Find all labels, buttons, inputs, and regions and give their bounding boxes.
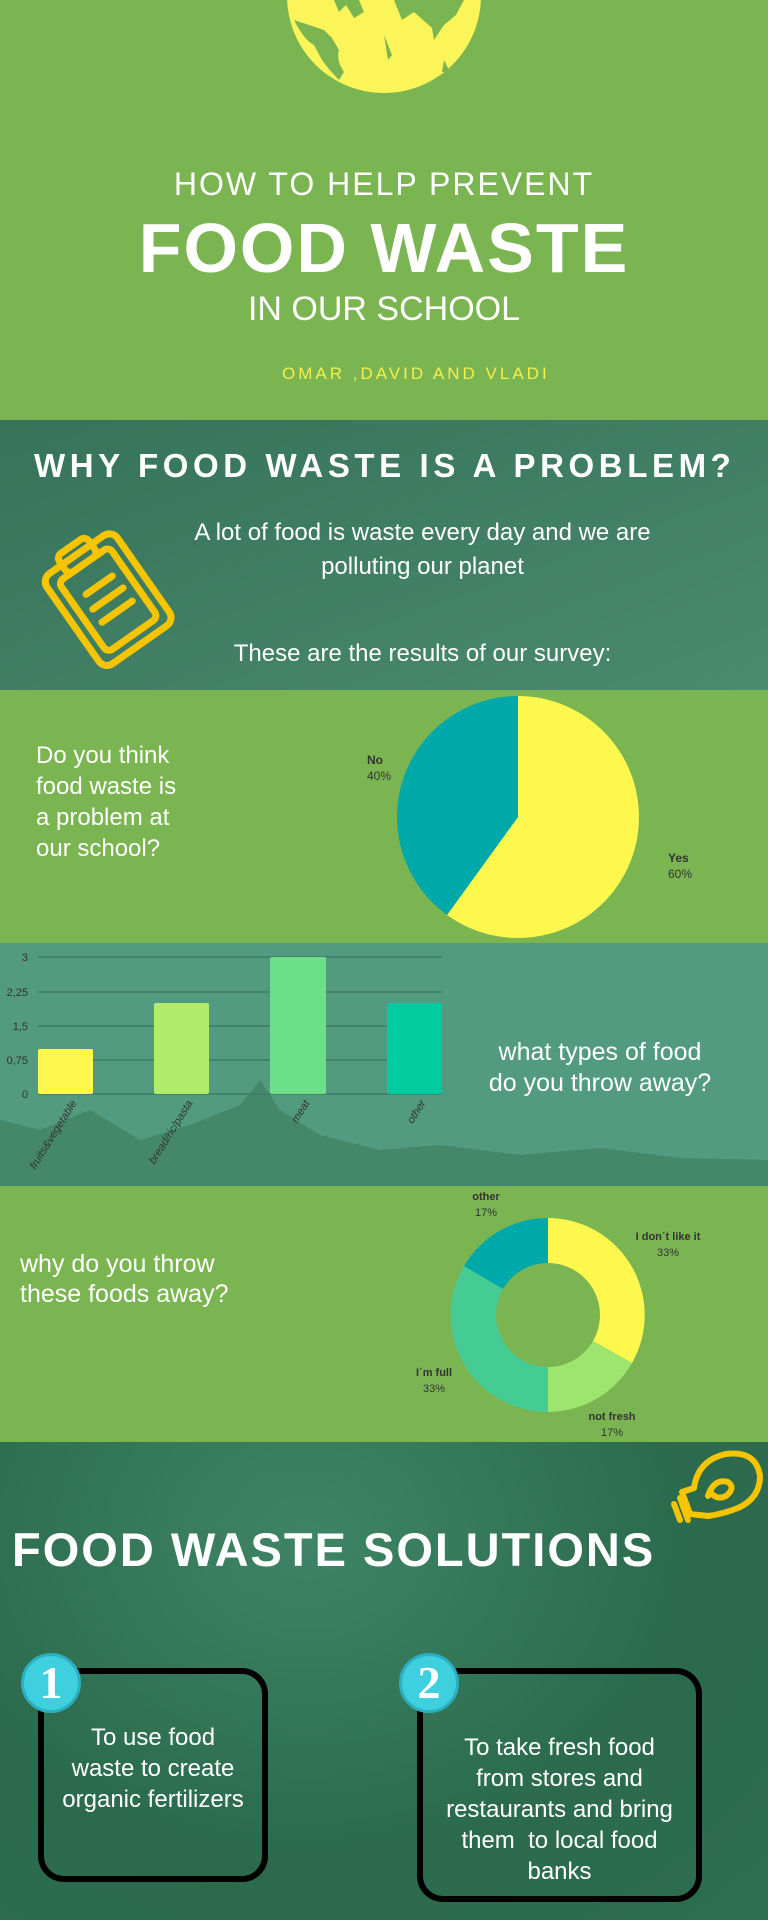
header section bbox=[0, 0, 768, 420]
donut chart: I´m full bbox=[416, 1367, 452, 1379]
panel: solutions bbox=[0, 1442, 768, 1920]
donut chart bbox=[416, 1191, 701, 1439]
pie chart: No bbox=[367, 753, 383, 767]
question text: why do you throw bbox=[20, 1250, 215, 1278]
panel: bar chart: 3 bbox=[22, 952, 28, 964]
donut chart: 17% bbox=[475, 1207, 497, 1219]
pie chart bbox=[367, 696, 692, 938]
solution 2 card: To take fresh food bbox=[464, 1734, 655, 1761]
donut chart: other bbox=[472, 1191, 500, 1203]
solution 2 card: restaurants and bring bbox=[446, 1796, 673, 1823]
solution 1 card: waste to create bbox=[72, 1755, 234, 1782]
donut chart: 33% bbox=[423, 1383, 445, 1395]
panel: pie question bbox=[0, 690, 768, 943]
question text bbox=[489, 1038, 711, 1097]
question text bbox=[20, 1250, 228, 1308]
panel: donut question bbox=[0, 1186, 768, 1442]
question text: do you throw away? bbox=[489, 1069, 711, 1097]
text: survey: These are the results of our survey: bbox=[234, 640, 611, 667]
panel: bar chart: bread/ric/pasta bbox=[147, 1098, 196, 1166]
pie chart: 60% bbox=[668, 867, 692, 881]
question text: food waste is bbox=[36, 773, 176, 800]
question text: Do you think bbox=[36, 742, 169, 769]
panel: why problem bbox=[0, 420, 768, 690]
panel: bar chart: 1,5 bbox=[13, 1021, 28, 1033]
badge 2: 2 bbox=[418, 1657, 440, 1708]
solution 1 card: organic fertilizers bbox=[62, 1786, 244, 1813]
solution 1 card: To use food bbox=[91, 1724, 215, 1751]
title main: FOOD WASTE bbox=[139, 209, 629, 287]
question text bbox=[36, 742, 176, 862]
panel: bar chart bbox=[0, 943, 768, 1186]
donut chart: I don´t like it bbox=[636, 1231, 701, 1243]
pie chart: Yes bbox=[668, 851, 689, 865]
badge 1: 1 bbox=[40, 1657, 62, 1708]
solution 2 card: banks bbox=[527, 1858, 592, 1885]
panel: bar chart: meat bbox=[289, 1097, 313, 1125]
panel: bar chart: fruits&vegetable bbox=[28, 1098, 80, 1171]
solution 2 card: them to local food bbox=[461, 1827, 658, 1854]
title line 1: HOW TO HELP PREVENT bbox=[174, 166, 594, 202]
text: lot of food: A lot of food is waste every day and we are polluting our planet bbox=[194, 519, 651, 580]
solution 2 card bbox=[417, 1668, 702, 1902]
pie chart: 40% bbox=[367, 769, 391, 783]
heading: FOOD WASTE SOLUTIONS bbox=[12, 1523, 655, 1576]
question text: a problem at bbox=[36, 804, 169, 831]
donut chart: 33% bbox=[657, 1247, 679, 1259]
bars bbox=[38, 957, 442, 1094]
icon: clipboard bbox=[42, 530, 174, 669]
panel: bar chart: 0,75 bbox=[7, 1055, 28, 1067]
question text: these foods away? bbox=[20, 1280, 228, 1308]
panel: bar chart: other bbox=[405, 1097, 429, 1126]
icon: light bulb bbox=[671, 1450, 763, 1523]
solution 2 card: from stores and bbox=[476, 1765, 643, 1792]
question text: what types of food bbox=[499, 1038, 701, 1066]
panel: bar chart: 0 bbox=[22, 1089, 28, 1101]
badge 2 bbox=[399, 1653, 459, 1713]
donut chart: not fresh bbox=[588, 1411, 636, 1423]
solution 1 card bbox=[38, 1668, 268, 1882]
title line 3: IN OUR SCHOOL bbox=[248, 290, 520, 328]
heading: WHY FOOD WASTE IS A PROBLEM? bbox=[34, 447, 735, 484]
donut chart: 17% bbox=[601, 1427, 623, 1439]
panel: bar chart: 2,25 bbox=[7, 987, 28, 999]
icon: globe bbox=[287, 0, 481, 93]
question text: our school? bbox=[36, 835, 160, 862]
authors: OMAR ,DAVID AND VLADI bbox=[282, 364, 550, 383]
badge 1 bbox=[21, 1653, 81, 1713]
